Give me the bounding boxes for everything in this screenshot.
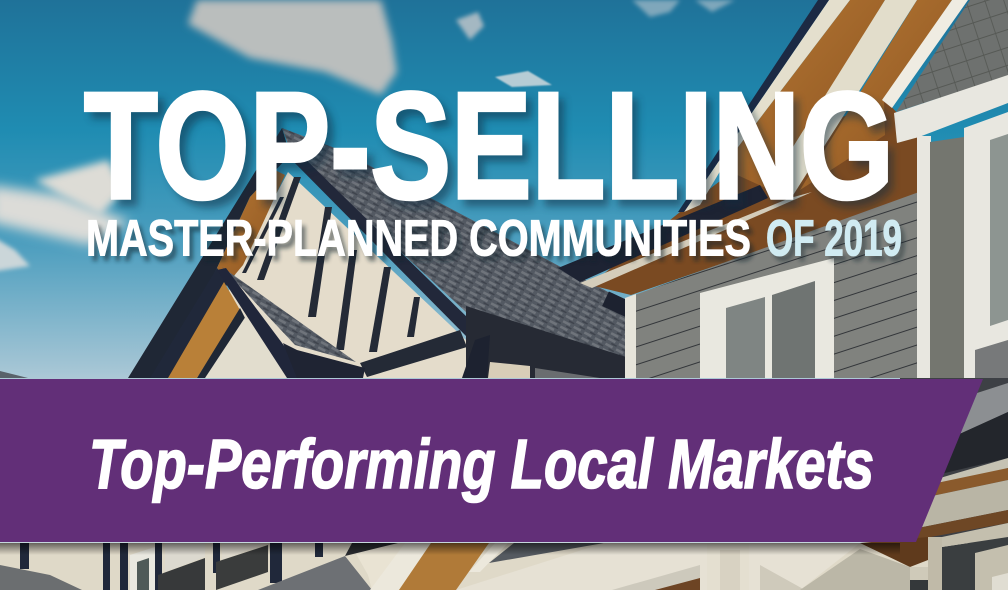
gable wood soffit xyxy=(722,0,885,190)
taupe wall xyxy=(800,549,910,590)
corner trim xyxy=(625,294,636,378)
cream tudor wall xyxy=(195,172,466,378)
eave gutter xyxy=(558,185,768,282)
wood soffit and fascia xyxy=(370,543,431,590)
tall panel xyxy=(917,136,931,378)
inner dark line xyxy=(197,308,245,378)
lower window frame xyxy=(700,258,834,378)
shake siding xyxy=(896,0,1008,112)
timbers xyxy=(242,177,467,377)
subtitle: MASTER-PLANNED COMMUNITIES xyxy=(90,215,755,272)
white wall xyxy=(456,543,860,590)
lower house strip xyxy=(0,523,1008,590)
right side roof beside banner xyxy=(870,378,1008,548)
white trim band xyxy=(894,75,1008,143)
lower wood soffit xyxy=(168,282,240,378)
neighbour roof at left xyxy=(0,371,28,378)
porch column xyxy=(928,537,942,590)
brown porch soffit xyxy=(860,537,928,567)
small gable shingle wall xyxy=(205,316,288,378)
siding wall xyxy=(632,192,919,378)
upper wood soffit xyxy=(217,170,285,283)
soffit backing xyxy=(590,100,920,295)
small gable roof xyxy=(222,267,356,362)
main shingled roof xyxy=(282,128,629,365)
main eave and gutter xyxy=(466,306,629,378)
lower windows xyxy=(130,547,155,590)
porch post xyxy=(707,543,749,590)
shadow under banner xyxy=(0,543,900,555)
right house: gable, siding and windows xyxy=(558,0,1008,378)
main barge board xyxy=(284,150,470,337)
gable white bands xyxy=(684,0,850,212)
subtitle: MASTER-PLANNED COMMUNITIES xyxy=(86,210,751,266)
subtitle: OF 2019 xyxy=(766,210,902,266)
outer dark fascia xyxy=(128,128,290,378)
subtitle: OF 2019 xyxy=(770,215,906,272)
second dark fascia xyxy=(150,268,228,378)
banner xyxy=(0,379,983,542)
downpipe xyxy=(602,292,632,317)
lower roofs xyxy=(0,565,82,590)
left house: tudor gable and roof xyxy=(0,128,632,378)
